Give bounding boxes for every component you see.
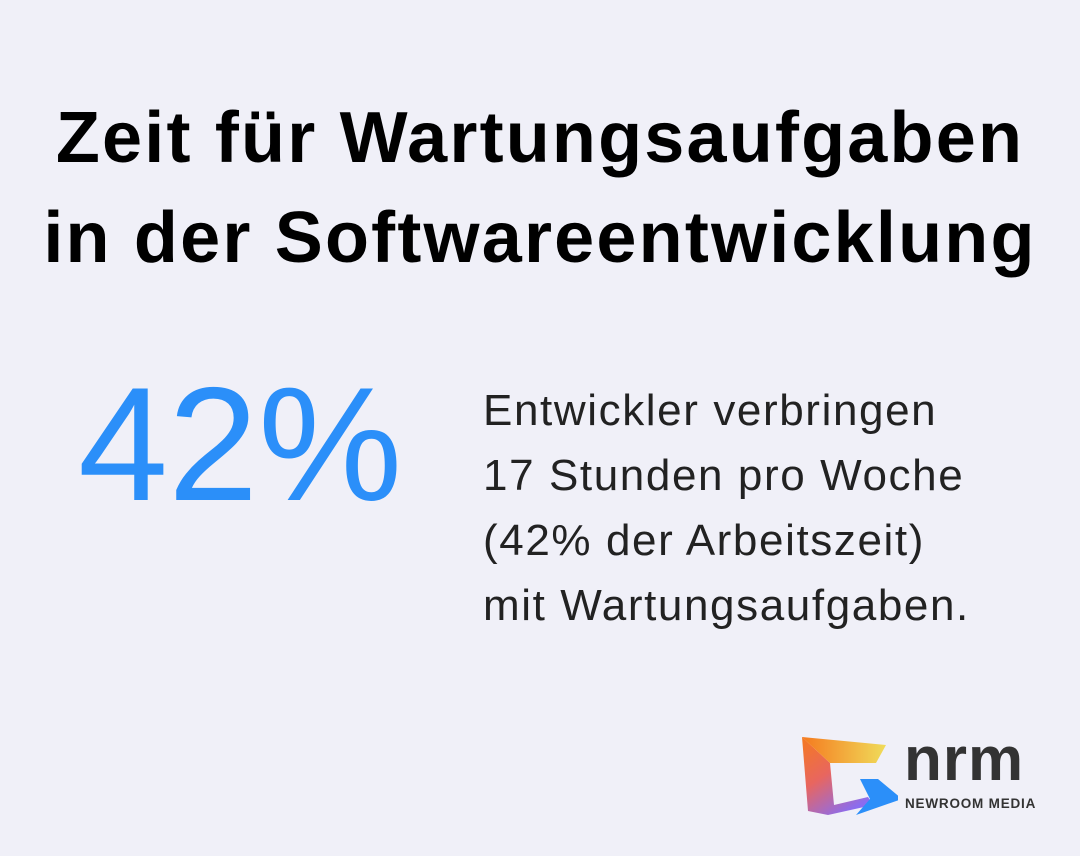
icon: logo mark [802, 737, 898, 815]
title: in der Softwareentwicklung [43, 198, 1037, 278]
title [43, 98, 1037, 278]
logo text: nrm [904, 725, 1024, 794]
logo [802, 725, 1036, 815]
logo: NEWROOM MEDIA [905, 796, 1036, 811]
title: Zeit für Wartungsaufgaben [56, 98, 1024, 178]
big statistic: 42% [78, 354, 402, 535]
description text: (42% der Arbeitszeit) [483, 516, 925, 565]
description text: Entwickler verbringen [483, 386, 937, 435]
description text [483, 386, 970, 630]
description text: mit Wartungsaufgaben. [483, 581, 970, 630]
description text: 17 Stunden pro Woche [483, 451, 964, 500]
